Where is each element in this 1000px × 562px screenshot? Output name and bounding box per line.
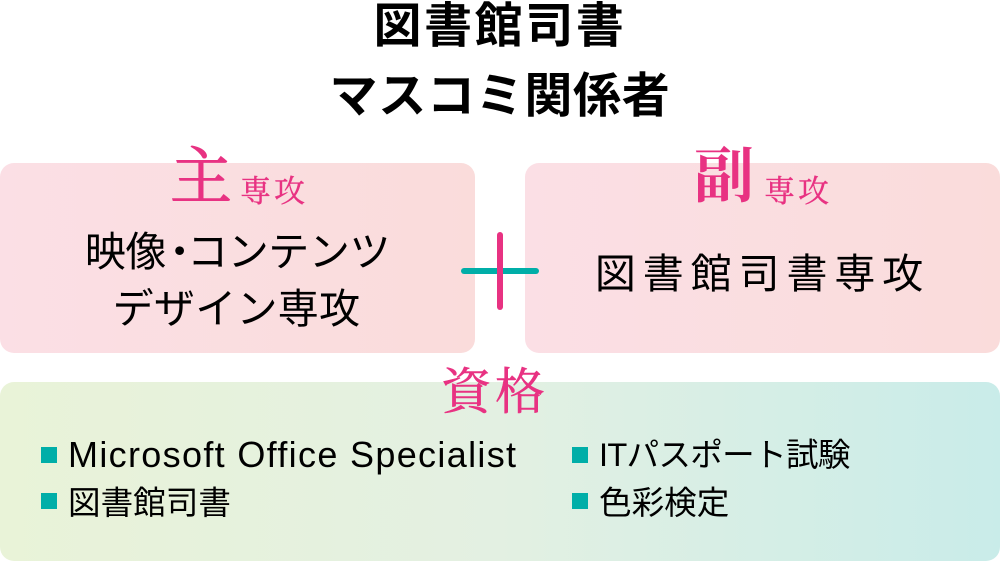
major line 2: デザイン専攻 [113, 286, 360, 332]
sub major text: 図書館司書専攻 [595, 251, 930, 297]
title line 1: 図書館司書 [373, 0, 626, 53]
qualification 4: 色彩検定 [599, 484, 729, 521]
heading: sub major [694, 144, 832, 210]
qualification 2: 図書館司書 [68, 484, 231, 521]
main major text [85, 229, 390, 332]
vertical bar [497, 232, 503, 310]
large character: 副 [694, 144, 754, 210]
heading: qualifications: 資格 [441, 364, 549, 420]
small characters: 専攻 [764, 174, 832, 209]
panel: sub major [525, 163, 1000, 353]
title [330, 0, 670, 123]
heading: main major [170, 144, 308, 212]
qualification 3: ITパスポート試験 [599, 436, 850, 473]
icon: plus sign [461, 232, 539, 310]
qualification 1: Microsoft Office Specialist [68, 434, 517, 475]
small characters: 専攻 [240, 174, 308, 209]
horizontal bar [461, 268, 539, 274]
panel: main major [0, 163, 475, 353]
panel: qualifications [0, 382, 1000, 561]
large character: 主 [170, 144, 232, 212]
major line 1: 映像・コンテンツ [85, 229, 390, 275]
title line 2: マスコミ関係者 [330, 70, 670, 123]
